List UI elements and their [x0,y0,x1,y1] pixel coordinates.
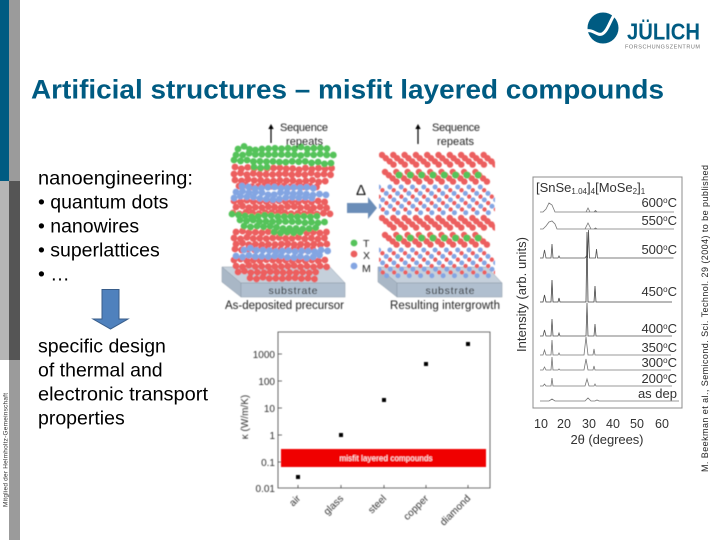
chart: XRD temperature series [514,177,682,447]
plot frame and ticks [278,332,490,488]
temperature labels: C [668,284,677,299]
x axis labels: air [287,493,304,509]
temperature labels: as dep [638,386,677,401]
temperature labels: C [668,321,677,336]
arrow: sequence repeats left: Sequence [280,122,328,134]
chart compound label: 2 [633,187,638,196]
x axis labels: steel [366,493,389,516]
x axis tick labels: 40 [606,417,620,431]
temperature labels: C [668,355,677,370]
arrow: sequence repeats left [268,122,328,148]
temperature labels: C [668,340,677,355]
arrow: annealing [347,182,377,219]
text block: nanoengineering list: • quantum dots [38,192,169,214]
trace: 300C [540,357,671,370]
arrow: sequence repeats right [415,122,480,148]
chart compound label: 1.04 [571,187,588,196]
legend: atom types [351,238,371,275]
temperature labels: o [663,322,668,331]
text block: nanoengineering list: • … [38,264,70,286]
y axis labels: 0.1 [261,458,275,469]
temperature labels: o [663,243,668,252]
x axis labels: diamond [438,493,473,528]
text block: nanoengineering list: • nanowires [38,216,139,238]
temperature labels: 200 [641,371,663,386]
x axis labels [287,493,473,528]
panel: as-deposited precursor [222,146,345,312]
text block: specific design: electronic transport [38,384,209,406]
chart compound label: 4 [591,187,596,196]
y axis title: κ (W/m/K) [240,395,251,439]
temperature labels: 400 [641,321,663,336]
text block: nanoengineering list: nanoengineering: [38,168,193,190]
text block: nanoengineering list: • superlattices [38,240,160,262]
chart: thermal conductivity of materials [240,332,490,528]
substrate slab [222,267,345,297]
band: misfit layered compounds: misfit layered compounds [340,454,432,463]
arrow: sequence repeats right: Sequence [432,122,480,134]
panel: resulting intergrowth [377,151,503,312]
temperature labels: o [663,196,668,205]
plot frame [533,177,682,408]
temperature labels: 500 [641,242,663,257]
temperature labels: 550 [641,213,663,228]
legend: atom types: M [362,263,371,275]
trace: 500C [540,230,674,258]
temperature labels: o [663,214,668,223]
temperature labels: 350 [641,340,663,355]
x axis labels: copper [402,493,432,523]
trace: 550C [540,221,674,229]
temperature labels: o [663,285,668,294]
temperature labels: 300 [641,355,663,370]
diagram: precursor to intergrowth [222,122,514,312]
legend: atom types: X [363,250,370,262]
temperature labels [638,195,677,401]
logo wordmark: JÜLICH [627,18,700,44]
x axis tick labels: 10 [534,417,548,431]
band: misfit layered compounds [281,449,486,467]
atom layers [378,151,496,279]
y axis labels: 100 [258,377,275,388]
y axis labels: 10 [264,404,275,415]
substrate slab: substrate [268,285,318,297]
chart compound label: ] [637,180,641,195]
text block: specific design [38,336,209,430]
text block: specific design: specific design [38,336,166,358]
temperature labels: 600 [641,195,663,210]
substrate slab: substrate [426,285,475,297]
temperature labels: C [668,213,677,228]
temperature labels: o [663,372,668,381]
y axis labels: 1 [269,431,275,442]
y axis labels: 1000 [253,350,275,361]
arrow: annealing: Δ [356,182,366,199]
title: Artificial structures – misfit layered compounds [31,74,664,104]
trace: 200C [540,378,672,386]
chart compound label: [MoSe [595,180,633,195]
citation: M. Beekman et al., Semicond. Sci. Technol. 29 (2004) to be published [700,165,710,472]
chart compound label: [SnSe [536,180,571,195]
left colour sidebar [0,0,20,540]
chart compound label: ] [587,180,591,195]
temperature labels: 450 [641,284,663,299]
trace: as dep [540,398,679,401]
chart compound label: 1 [641,187,646,196]
text block: nanoengineering list [38,168,193,286]
temperature labels: C [668,242,677,257]
text block: specific design: properties [38,408,125,430]
arrow: down to design [93,290,128,329]
logo: Jülich Forschungszentrum [586,12,700,50]
x axis tick labels: 20 [557,417,571,431]
trace: 400C [540,303,672,336]
trace: 600C [540,203,679,401]
atom layers [232,146,334,279]
arrow: sequence repeats right: repeats [437,136,474,148]
temperature labels: C [668,195,677,210]
data points [296,342,470,479]
trace: 450C [540,232,672,302]
text block: specific design: of thermal and [38,360,163,382]
temperature labels: o [663,341,668,350]
trace: 350C [540,337,671,355]
x axis tick labels: 30 [582,417,596,431]
sidebar membership text: Mitglied der Helmholtz-Gemeinschaft [2,393,10,507]
x axis tick labels: 50 [630,417,644,431]
icon: logo swoosh [586,12,618,44]
x axis tick labels: 60 [655,417,669,431]
x axis title: 2θ (degrees) [570,432,644,447]
x axis labels: glass [322,493,346,518]
caption: Resulting intergrowth [390,300,500,312]
substrate slab [378,267,502,297]
arrow: sequence repeats left: repeats [286,136,324,148]
y axis labels: 0.01 [256,484,275,495]
legend: atom types: T [363,238,370,250]
caption: As-deposited precursor [225,300,344,312]
x axis tick labels [534,417,669,431]
logo subline: FORSCHUNGSZENTRUM [625,44,700,50]
y axis labels [253,350,275,495]
temperature labels: C [668,371,677,386]
temperature labels: o [663,356,668,365]
y axis title: Intensity (arb. units) [514,237,529,352]
